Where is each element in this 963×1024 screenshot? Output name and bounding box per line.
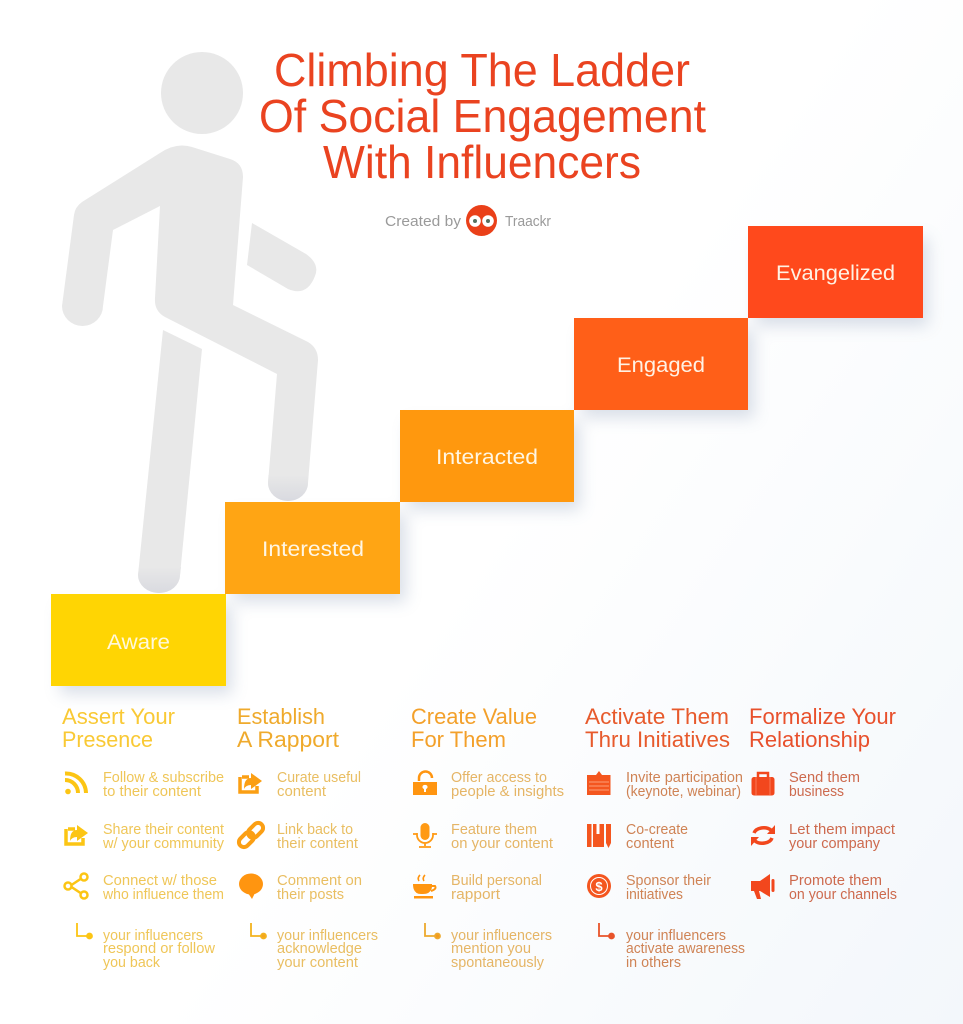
list text: initiatives [626, 886, 683, 903]
list text: spontaneously [451, 954, 544, 971]
credit: created by Traackr [385, 205, 551, 236]
list text: Link back to [277, 821, 353, 838]
list text: to their content [103, 783, 202, 800]
list text: people & insights [451, 783, 564, 800]
heading: A Rapport [237, 727, 339, 752]
list text: your content [277, 954, 359, 971]
list text: your influencers [626, 927, 726, 944]
heading: Assert Your [62, 704, 175, 729]
list text: in others [626, 954, 681, 971]
list text: who influence them [102, 886, 224, 903]
step: Engaged [574, 318, 748, 410]
step: Evangelized: Evangelized [776, 262, 895, 285]
list text: Feature them [451, 821, 537, 838]
panel: Activate Them Thru Initiatives [585, 704, 745, 971]
list text: mention you [451, 940, 531, 957]
icon: open lock [413, 772, 437, 795]
list text: Sponsor their [626, 872, 711, 889]
list text: Send them [789, 769, 860, 786]
list text: Share their content [103, 821, 225, 838]
icon: calendar [587, 771, 610, 795]
step: Interested: Interested [262, 538, 364, 561]
icon: arrow response [425, 923, 440, 938]
icon: briefcase [752, 773, 774, 796]
step: Aware [51, 594, 226, 686]
icon: rss [65, 773, 86, 794]
panel: Create Value For Them [411, 704, 564, 971]
icon: climbing figure [62, 52, 318, 593]
list text: Co-create [626, 821, 688, 838]
list text [451, 769, 564, 971]
list text: Follow & subscribe [103, 769, 224, 786]
heading: Relationship [749, 727, 870, 752]
panel: Establish A Rapport [237, 704, 378, 971]
step: Interacted: Interacted [436, 446, 538, 469]
list text: on your channels [789, 886, 897, 903]
icon: chain link [237, 821, 265, 849]
icon: dollar coin [587, 874, 611, 898]
list text: Offer access to [451, 769, 547, 786]
heading [411, 704, 537, 752]
list text: on your content [451, 835, 554, 852]
list text: Promote them [789, 872, 882, 889]
title: Of Social Engagement [259, 90, 706, 142]
credit: created by Traackr: Created by [385, 213, 462, 230]
heading [749, 704, 896, 752]
list text: acknowledge [277, 940, 362, 957]
icon: comment bubble [239, 874, 263, 899]
credit: created by Traackr: Traackr [505, 213, 551, 230]
panel: Formalize Your Relationship [749, 704, 897, 903]
step: Aware: Aware [107, 631, 170, 654]
title: Climbing The Ladder [274, 44, 690, 96]
list text: Comment on [277, 872, 362, 889]
list text: you back [103, 954, 160, 971]
icon: microphone [413, 823, 437, 847]
list text: respond or follow [103, 940, 215, 957]
icon: share [240, 773, 262, 792]
step: Engaged: Engaged [617, 354, 705, 377]
list text [102, 769, 225, 971]
list text: your influencers [277, 927, 378, 944]
list text: Connect w/ those [103, 872, 217, 889]
panel: Assert Your Presence [62, 704, 225, 971]
list text: (keynote, webinar) [626, 783, 741, 800]
list text: Let them impact [789, 821, 896, 838]
list text: your company [789, 835, 880, 852]
icon: refresh arrows [751, 825, 775, 846]
title: With Influencers [323, 136, 641, 188]
icon: arrow response [251, 923, 266, 938]
heading: Thru Initiatives [585, 727, 730, 752]
list text: your influencers [103, 927, 203, 944]
heading [585, 704, 730, 752]
list text: business [789, 783, 844, 800]
staircase [51, 226, 928, 694]
icon: arrow response [599, 923, 614, 938]
list text: content [626, 835, 675, 852]
heading: Create Value [411, 704, 537, 729]
heading: Activate Them [585, 704, 729, 729]
list text [277, 769, 378, 971]
list text: Invite participation [626, 769, 743, 786]
icon: connect nodes [64, 874, 88, 898]
icon: share [66, 825, 88, 844]
list text: rapport [451, 886, 501, 903]
step: Interacted [400, 410, 574, 502]
icon: coffee cup [413, 875, 436, 898]
step: Interested [225, 502, 400, 594]
list text [626, 769, 745, 971]
list text: w/ your community [102, 835, 224, 852]
list text: their content [277, 835, 359, 852]
icon: dollar coin: $ [595, 879, 603, 894]
heading: Formalize Your [749, 704, 896, 729]
heading: Presence [62, 727, 153, 752]
heading [237, 704, 339, 752]
list text: your influencers [451, 927, 552, 944]
list text: content [277, 783, 327, 800]
heading: Establish [237, 704, 325, 729]
list text: activate awareness [626, 940, 745, 957]
icon: arrow response [77, 923, 92, 938]
title [259, 44, 706, 188]
heading [62, 704, 175, 752]
list text: their posts [277, 886, 344, 903]
step: Evangelized [748, 226, 923, 318]
list text: Build personal [451, 872, 542, 889]
heading: For Them [411, 727, 506, 752]
icon: megaphone [751, 874, 774, 899]
list text [789, 769, 897, 903]
list text: Curate useful [277, 769, 361, 786]
icon: book and pencil [587, 824, 611, 848]
